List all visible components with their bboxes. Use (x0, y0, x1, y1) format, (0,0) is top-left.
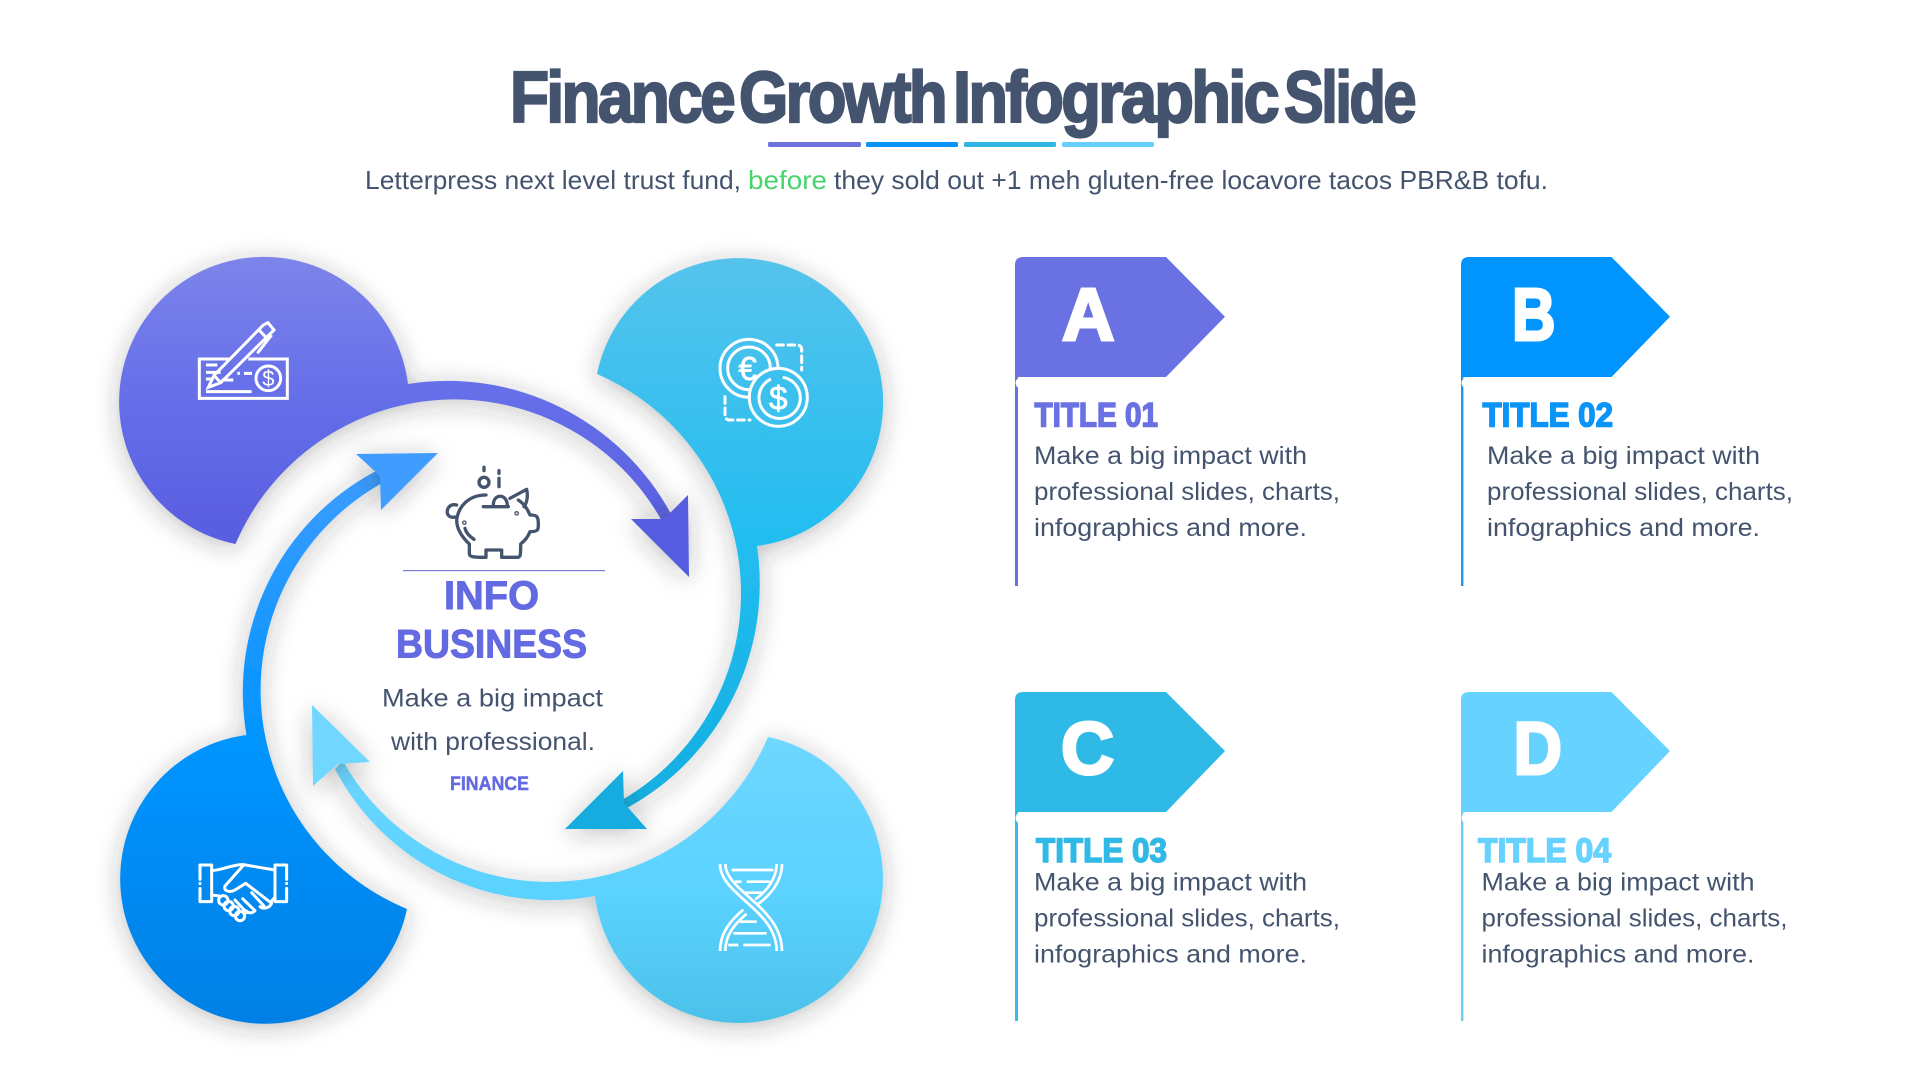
arrowhead: light blue (312, 705, 370, 786)
panel: card C (1015, 692, 1340, 1021)
body text B: infographics and more. (1487, 514, 1760, 542)
subtitle: Letterpress next level trust fund, (365, 165, 741, 195)
body text C: infographics and more. (1034, 941, 1307, 969)
swirl segment: purple circle with arc (119, 257, 671, 544)
title 04: TITLE 04 (1478, 832, 1611, 870)
body text C: professional slides, charts, (1034, 905, 1340, 933)
title underline bars (768, 142, 1154, 147)
icon: cheque and pen: $ (262, 366, 274, 391)
arrowhead: purple (631, 495, 689, 577)
tag: A (1015, 257, 1225, 377)
divider (403, 570, 605, 571)
subtitle (365, 165, 1548, 195)
title 01: TITLE 01 (1034, 396, 1158, 434)
heading: info business: BUSINESS (396, 622, 587, 666)
title: Infographic (953, 58, 1278, 138)
panel: card A (1015, 257, 1340, 586)
heading: info business (396, 574, 587, 666)
letter D: D (1514, 707, 1562, 790)
body text B (1487, 442, 1793, 542)
swirl segment: light blue circle with arc (335, 737, 883, 1023)
body text D: infographics and more. (1482, 941, 1754, 969)
body text C: Make a big impact with (1034, 869, 1307, 897)
body text A: professional slides, charts, (1034, 478, 1340, 506)
center content (382, 467, 605, 795)
body text B: Make a big impact with (1487, 442, 1760, 470)
body text A: infographics and more. (1034, 514, 1307, 542)
title: Slide (1284, 58, 1415, 138)
swirl segment: blue circle with arc (120, 471, 407, 1024)
swirl segment: cyan circle with arc (597, 258, 883, 808)
finance label: FINANCE (450, 774, 529, 795)
body text C (1034, 869, 1340, 969)
title: Finance (510, 58, 734, 138)
title 02: TITLE 02 (1482, 396, 1613, 434)
icon: piggy bank (447, 467, 538, 557)
icon: DNA helix (723, 864, 779, 951)
tag: B (1461, 257, 1670, 377)
body text A (1034, 442, 1340, 542)
icon: euro and dollar coins: € (738, 351, 757, 388)
body text A: Make a big impact with (1034, 442, 1307, 470)
heading: info business: INFO (444, 574, 539, 618)
body text D (1482, 869, 1788, 969)
letter B: B (1512, 273, 1556, 356)
tag: D (1461, 692, 1670, 812)
subtitle: before (748, 165, 827, 195)
icon: euro and dollar coins (720, 339, 807, 426)
subtitle: they sold out +1 meh gluten-free locavore tacos PBR&B tofu. (834, 165, 1548, 195)
panel: card D (1461, 692, 1788, 1021)
center description (382, 684, 603, 756)
cycle diagram (119, 257, 883, 1024)
icon: euro and dollar coins: $ (769, 380, 788, 417)
body text D: Make a big impact with (1482, 869, 1754, 897)
letter C: C (1061, 707, 1114, 790)
body text B: professional slides, charts, (1487, 478, 1793, 506)
title 03: TITLE 03 (1036, 832, 1167, 870)
title (510, 58, 1415, 138)
letter A: A (1062, 273, 1114, 356)
arrowhead: cyan (565, 771, 647, 829)
panel: card B (1461, 257, 1793, 586)
body text D: professional slides, charts, (1482, 905, 1788, 933)
center description: Make a big impact (382, 684, 603, 712)
icon: cheque and pen (199, 323, 287, 398)
center description: with professional. (390, 728, 595, 756)
icon: handshake (200, 865, 287, 921)
tag: C (1015, 692, 1225, 812)
arrowhead: blue (356, 453, 438, 510)
title: Growth (739, 58, 945, 138)
